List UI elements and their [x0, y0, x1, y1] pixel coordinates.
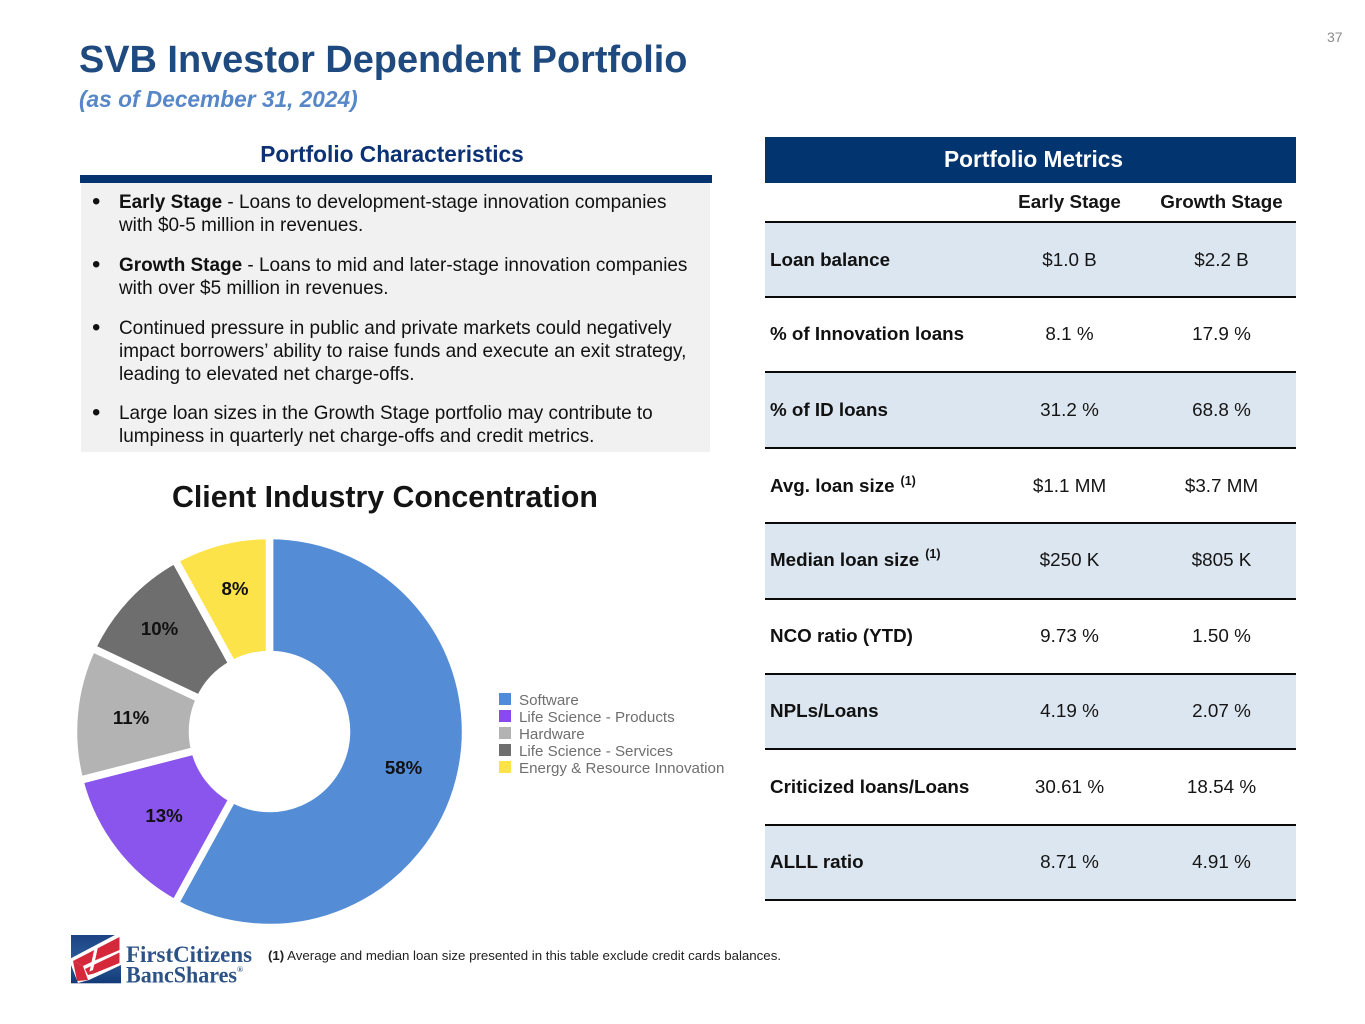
bullet 3: market pressure: Continued pressure in public and private markets could negatively — [119, 318, 672, 339]
legend item: energy and resource innovation — [499, 760, 724, 777]
heading: client industry concentration: Client Industry Concentration — [172, 481, 598, 514]
data labels — [113, 578, 423, 826]
data labels: 58% — [385, 757, 423, 778]
row: average loan size: $3.7 MM — [1185, 475, 1258, 496]
column: growth stage: Growth Stage — [1160, 190, 1283, 212]
characteristics text panel — [81, 183, 710, 452]
row: loan balance: Loan balance — [770, 249, 890, 270]
row: average loan size — [765, 449, 1296, 524]
bullet 4 marker: • — [92, 399, 100, 426]
bullet 2: growth stage — [119, 255, 687, 299]
row: NPLs to loans: 4.19 % — [1040, 700, 1099, 721]
chart legend: Hardware — [519, 726, 585, 743]
row: percent of innovation loans: 17.9 % — [1192, 323, 1251, 344]
chart legend: Life Science - Products — [519, 709, 675, 726]
row: average loan size: Avg. loan size (1) — [770, 474, 916, 496]
chart legend: Energy & Resource Innovation — [519, 760, 724, 777]
row: loan balance: $2.2 B — [1194, 249, 1249, 270]
slice: life science services 10% — [92, 560, 232, 699]
row: criticized loans: 30.61 % — [1035, 776, 1104, 796]
row: NCO ratio: 1.50 % — [1192, 625, 1251, 646]
row: median loan size: Median loan size (1) — [770, 547, 941, 570]
row: percent of innovation loans: % of Innovation loans — [770, 323, 964, 344]
bullet 1: early stage: Early Stage - Loans to development-stage innovation companies — [119, 192, 666, 213]
legend item: software — [499, 692, 579, 709]
row: NPLs to loans: 2.07 % — [1192, 700, 1251, 721]
footnote: (1) Average and median loan size presented in this table exclude credit cards balances. — [268, 948, 781, 963]
data labels: 11% — [113, 707, 150, 728]
row: NCO ratio: 9.73 % — [1040, 625, 1099, 646]
row: criticized loans: 18.54 % — [1187, 776, 1256, 796]
bullet 1: early stage: with $0-5 million in revenues. — [119, 215, 363, 236]
column headers — [765, 183, 1296, 223]
logo: First Citizens BancShares — [71, 935, 252, 988]
row: NCO ratio — [765, 600, 1296, 675]
bullet 4: loan sizes — [119, 403, 653, 447]
row: NPLs to loans — [765, 675, 1296, 750]
bullet 3: market pressure — [119, 318, 686, 385]
row: ALLL ratio — [765, 826, 1296, 901]
bullet 4: loan sizes: Large loan sizes in the Growth Stage portfolio may contribute to — [119, 403, 653, 424]
logo flag — [71, 932, 121, 983]
row: percent of ID loans: 68.8 % — [1192, 398, 1251, 420]
data labels: 10% — [141, 618, 179, 639]
legend item: hardware — [499, 726, 585, 743]
row: percent of ID loans: 31.2 % — [1040, 398, 1099, 420]
bullet 1 marker: • — [92, 188, 100, 215]
bullet 3: market pressure: leading to elevated net charge-offs. — [119, 364, 414, 385]
slice: hardware 11% — [73, 648, 200, 780]
row: percent of innovation loans — [765, 298, 1296, 373]
bullet 3 marker: • — [92, 314, 100, 341]
table header: portfolio metrics — [765, 137, 1296, 183]
bullet 3: market pressure: impact borrowers’ ability to raise funds and execute an exit strategy, — [119, 341, 686, 362]
row: percent of ID loans — [765, 373, 1296, 449]
title: SVB Investor Dependent Portfolio — [79, 39, 687, 81]
row: NPLs to loans: NPLs/Loans — [770, 700, 879, 721]
logo wordmark: BancShares — [126, 962, 237, 988]
slice: energy and resource innovation 8% — [175, 536, 270, 664]
bullet 2: growth stage: with over $5 million in revenues. — [119, 278, 388, 299]
bullet 2 marker: • — [92, 251, 100, 278]
row: criticized loans — [765, 750, 1296, 826]
row: average loan size: $1.1 MM — [1033, 475, 1106, 496]
row: NCO ratio: NCO ratio (YTD) — [770, 625, 913, 646]
chart legend: Software — [519, 692, 579, 709]
row: percent of innovation loans: 8.1 % — [1045, 323, 1094, 344]
row: ALLL ratio: 8.71 % — [1040, 851, 1099, 872]
row: median loan size: $250 K — [1040, 548, 1099, 570]
slice: software 58% — [175, 536, 466, 927]
row: ALLL ratio: ALLL ratio — [770, 851, 864, 872]
data labels: 13% — [145, 805, 183, 826]
legend item: life science services — [499, 743, 673, 760]
heading: portfolio characteristics: Portfolio Characteristics — [260, 141, 524, 167]
page number: 37 — [1327, 29, 1343, 45]
row: median loan size: $805 K — [1192, 548, 1251, 570]
subtitle: (as of December 31, 2024) — [79, 86, 358, 112]
characteristics heading rule — [80, 175, 712, 183]
legend item: life science products — [499, 709, 675, 726]
logo wordmark: FirstCitizens — [126, 942, 252, 968]
data labels: 8% — [222, 578, 249, 599]
row: median loan size — [765, 524, 1296, 600]
row: loan balance — [765, 223, 1296, 298]
row: ALLL ratio: 4.91 % — [1192, 851, 1251, 872]
column: early stage: Early Stage — [1018, 190, 1121, 212]
table header: portfolio metrics: Portfolio Metrics — [944, 146, 1123, 172]
row: percent of ID loans: % of ID loans — [770, 398, 888, 420]
row: loan balance: $1.0 B — [1042, 249, 1097, 270]
logo wordmark — [126, 942, 252, 988]
chart legend: Life Science - Services — [519, 743, 673, 760]
chart legend — [499, 692, 724, 777]
bullet 1: early stage — [119, 192, 666, 236]
bullet 4: loan sizes: lumpiness in quarterly net charge-offs and credit metrics. — [119, 426, 594, 447]
logo wordmark: ® — [237, 965, 243, 974]
bullet 2: growth stage: Growth Stage - Loans to mid and later-stage innovation companies — [119, 255, 687, 276]
row: criticized loans: Criticized loans/Loans — [770, 776, 969, 796]
slice: life science products 13% — [80, 751, 232, 903]
